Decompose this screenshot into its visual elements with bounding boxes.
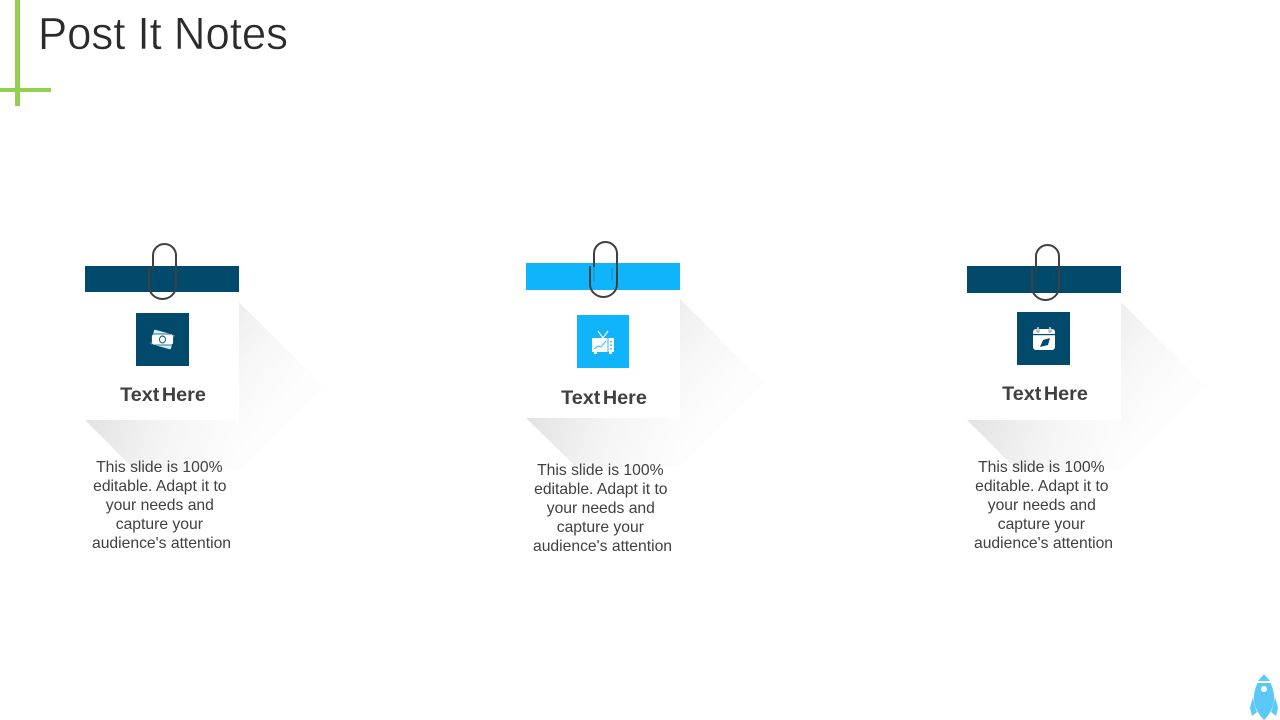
title accent: green cross lines [0, 0, 51, 106]
panel: note 1 [85, 244, 323, 552]
note 3 body text: your needs and [988, 497, 1096, 514]
note 3 heading: Text Here [1002, 383, 1088, 405]
note 1 header bar [85, 266, 239, 292]
note 1 heading: Text Here [120, 384, 206, 406]
note 3 body text: capture your [998, 516, 1085, 533]
title: Post It Notes [38, 8, 288, 59]
note 3 paperclip [1032, 245, 1059, 300]
note 2 body text: This slide is 100% [537, 462, 664, 479]
note 1 body text: audience's attention [92, 535, 231, 552]
note 3 body text: This slide is 100% [978, 459, 1105, 476]
note 3 header bar [967, 266, 1121, 293]
note 3 icon: calendar rocket [1017, 312, 1070, 365]
note 2 body text: editable. Adapt it to [534, 481, 668, 498]
note 2 fold shadows [526, 299, 764, 467]
note 1 paperclip [149, 244, 176, 299]
note 1 body text: capture your [116, 516, 203, 533]
note 3 body text: audience's attention [974, 535, 1113, 552]
note 2 body text: capture your [557, 519, 644, 536]
note 3 body text: editable. Adapt it to [975, 478, 1109, 495]
note 2 header bar [526, 263, 680, 290]
note 1 icon: banknotes [136, 313, 189, 366]
note 1 body text: your needs and [106, 497, 214, 514]
note 3 fold shadows [967, 302, 1205, 470]
note 2 icon: television chart [577, 315, 629, 368]
note 1 body text: editable. Adapt it to [93, 478, 227, 495]
note 2 heading: Text Here [561, 387, 647, 409]
panel: note 2 [526, 242, 764, 555]
panel: note 3 [967, 245, 1205, 552]
note 2 body text: your needs and [547, 500, 655, 517]
note 1 body text: This slide is 100% [96, 459, 223, 476]
icon: rocket [1250, 674, 1278, 720]
note 2 paperclip [590, 242, 617, 297]
note 1 fold shadows [85, 302, 323, 470]
note 2 body text: audience's attention [533, 538, 672, 555]
